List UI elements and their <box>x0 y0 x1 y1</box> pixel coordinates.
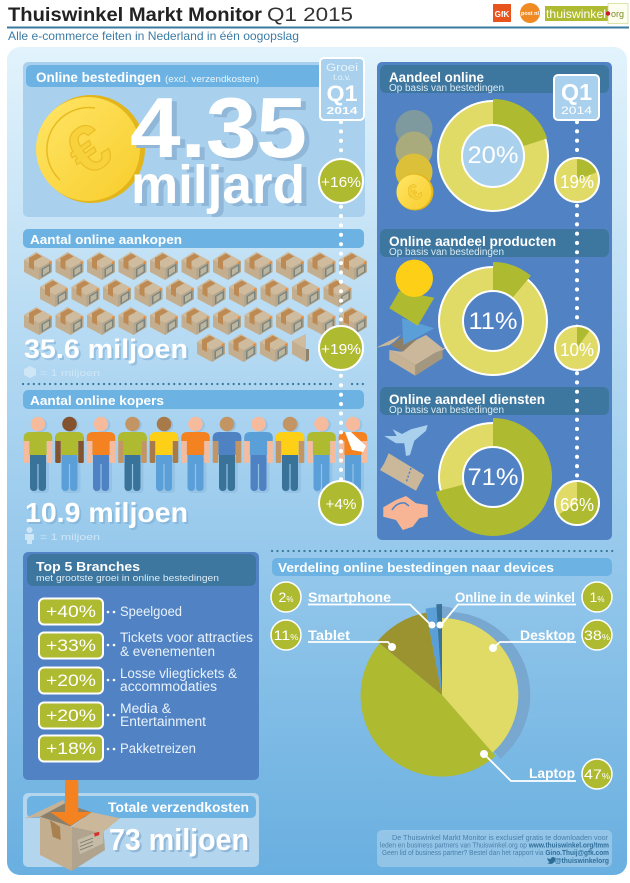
callout: tablet <box>271 620 396 651</box>
growth badge: +19% <box>319 326 363 370</box>
row: vliegtickets: +20% <box>46 671 96 690</box>
panel: top 5 branches <box>23 552 259 780</box>
donut chart: 20%: 20% <box>468 142 518 169</box>
stat: 73 miljoen: 73 miljoen <box>109 822 249 857</box>
row: media: +20% <box>46 706 96 725</box>
big number: miljard <box>131 155 305 215</box>
heading: verzendkosten <box>27 796 256 818</box>
row: pakketreizen: +18% <box>46 739 96 758</box>
row: media: Entertainment <box>120 714 206 729</box>
heading: kopers <box>23 390 364 409</box>
row: vliegtickets: accommodaties <box>120 679 217 694</box>
Q1 2014 label: Q1 <box>561 79 592 105</box>
callout: smartphone: 2% <box>279 589 293 605</box>
panel: aantal online kopers <box>23 390 367 544</box>
comparison pie: 19% <box>555 158 599 202</box>
Q1 2014 label: 2014 <box>561 105 592 117</box>
legend: package <box>24 366 100 379</box>
heading: online bestedingen: (excl. verzendkosten) <box>165 74 259 84</box>
comparison pie: 10%: 10% <box>560 340 594 360</box>
heading: devices <box>272 558 612 576</box>
donut chart: 20% <box>437 99 549 212</box>
icons: package grid <box>24 252 367 362</box>
icon: open box <box>25 800 120 871</box>
heading: top 5: Top 5 Branches <box>36 559 140 574</box>
icon: ticket <box>380 453 424 491</box>
big number: 4.35 <box>130 81 307 176</box>
heading: top 5: met grootste groei in online bestedingen <box>36 573 219 584</box>
subtitle: Alle e-commerce feiten in Nederland in één oogopslag <box>8 29 299 43</box>
comparison pie: 10% <box>555 326 599 370</box>
heading: top 5 <box>27 554 256 586</box>
dotted comparison line <box>575 122 579 482</box>
heading: aandeel online: Aandeel online <box>389 70 484 85</box>
growth label box: 2014 <box>326 105 358 117</box>
Q1 2014 label <box>554 75 599 120</box>
heading: verzendkosten: Totale verzendkosten <box>108 800 249 815</box>
row: speelgoed <box>39 598 182 624</box>
row: tickets: & evenementen <box>120 644 215 659</box>
logos: thuiswinkel <box>546 7 606 21</box>
callout: online in de winkel <box>436 582 612 628</box>
logos <box>493 3 628 24</box>
heading: online aandeel producten <box>380 229 609 258</box>
growth label box: t.o.v. <box>333 72 351 82</box>
panel: devices <box>271 558 612 789</box>
heading: kopers: Aantal online kopers <box>30 393 164 408</box>
dotted growth line <box>339 122 343 485</box>
icon: coin stack: € <box>402 179 426 206</box>
pie chart: devices <box>361 604 530 777</box>
comparison pie: 66% <box>555 481 599 525</box>
row: pakketreizen <box>39 736 196 762</box>
icons: people row <box>24 417 367 493</box>
callout: online in de winkel: Online in de winkel <box>455 589 575 605</box>
callout: tablet: Tablet <box>308 627 350 643</box>
row: media: Media & <box>120 701 171 716</box>
callout: desktop: Desktop <box>520 627 575 643</box>
footer note: @thuiswinkelorg <box>555 858 609 865</box>
callout: laptop: Laptop <box>529 765 575 781</box>
icon: coin stack <box>396 110 434 210</box>
arrow <box>50 780 92 826</box>
row: vliegtickets: Losse vliegtickets & <box>120 666 237 681</box>
title: Thuiswinkel Markt Monitor <box>8 4 262 26</box>
big number <box>130 81 307 215</box>
row: tickets: Tickets voor attracties <box>120 630 253 645</box>
panel: aandeel online <box>376 62 612 540</box>
icon: open box with shapes <box>376 260 456 376</box>
row: vliegtickets <box>39 666 237 694</box>
heading: devices: Verdeling online bestedingen naar devices <box>278 560 554 575</box>
growth label box <box>320 58 364 120</box>
row: tickets: +33% <box>46 636 96 655</box>
row: speelgoed: Speelgoed <box>120 604 182 619</box>
footer note <box>377 830 612 867</box>
legend: person <box>25 527 100 544</box>
growth label box: Groei <box>326 62 358 74</box>
panel: totale verzendkosten <box>23 780 259 871</box>
donut chart: 71%: 71% <box>468 464 518 491</box>
heading: online aandeel diensten: Online aandeel diensten <box>389 392 545 407</box>
heading: online aandeel producten: Online aandeel producten <box>389 234 556 249</box>
icon: handshake <box>383 496 428 530</box>
comparison pie: 19%: 19% <box>560 172 594 192</box>
growth badge: +19%: +19% <box>321 341 361 358</box>
row: media <box>39 701 206 729</box>
heading: aandeel online <box>380 65 609 94</box>
growth badge: +16%: +16% <box>321 174 361 191</box>
callout: tablet: 11 % <box>274 627 298 643</box>
stat: 10.9 miljoen: 10.9 miljoen <box>25 497 188 528</box>
panel: online bestedingen <box>23 62 365 217</box>
legend: person: = 1 miljoen <box>40 532 100 543</box>
heading: aandeel online: Op basis van bestedingen <box>389 83 504 94</box>
heading: online aandeel diensten <box>380 387 609 416</box>
row: pakketreizen: Pakketreizen <box>120 741 196 756</box>
divider dots <box>272 550 614 552</box>
growth badge: +4%: +4% <box>326 496 356 513</box>
donut chart: 11%: 11% <box>468 308 518 335</box>
row: tickets <box>39 630 253 659</box>
heading: online bestedingen <box>26 65 326 87</box>
growth badge: +16% <box>319 159 363 203</box>
callout: laptop <box>480 750 612 789</box>
heading: aankopen <box>23 229 364 248</box>
heading: online aandeel producten: Op basis van bestedingen <box>389 247 504 258</box>
heading: online bestedingen: Online bestedingen <box>36 70 161 85</box>
callout: desktop <box>489 620 612 652</box>
donut chart: 11% <box>438 262 548 376</box>
callout: online in de winkel: 1% <box>590 589 604 605</box>
callout: smartphone: Smartphone <box>308 589 391 605</box>
heading: aankopen: Aantal online aankopen <box>30 232 182 247</box>
growth label box: Q1 <box>326 81 358 106</box>
logos: org <box>611 9 624 19</box>
icon: euro coin <box>36 95 145 203</box>
legend: package: = 1 miljoen <box>40 368 100 379</box>
logos: GfK <box>495 10 510 19</box>
divider dots <box>23 383 332 385</box>
callout: laptop: 47 % <box>584 766 610 782</box>
callout: smartphone <box>271 582 436 628</box>
footer note: leden en business partners van Thuiswinkel.org op www.thuiswinkel.org/tmm <box>380 842 609 850</box>
icon: euro coin: € <box>52 108 124 190</box>
donut chart: 71% <box>436 418 552 536</box>
title: Q1 2015 <box>267 4 353 26</box>
growth badge: +4% <box>319 481 363 525</box>
logos: post nl <box>521 11 539 17</box>
stat: 35.6 miljoen: 35.6 miljoen <box>24 334 188 364</box>
heading: online aandeel diensten: Op basis van bestedingen <box>389 405 504 416</box>
row: speelgoed: +40% <box>46 602 96 621</box>
comparison pie: 66%: 66% <box>560 495 594 515</box>
icon: airplane <box>384 425 428 456</box>
panel: aantal online aankopen <box>23 229 367 379</box>
footer note: De Thuiswinkel Markt Monitor is exclusief gratis te downloaden voor <box>392 835 609 842</box>
callout: desktop: 38 % <box>584 627 610 643</box>
footer note: Geen lid of business partner? Bestel dan het rapport via Gino.Thuij@gfk.com <box>382 850 609 857</box>
